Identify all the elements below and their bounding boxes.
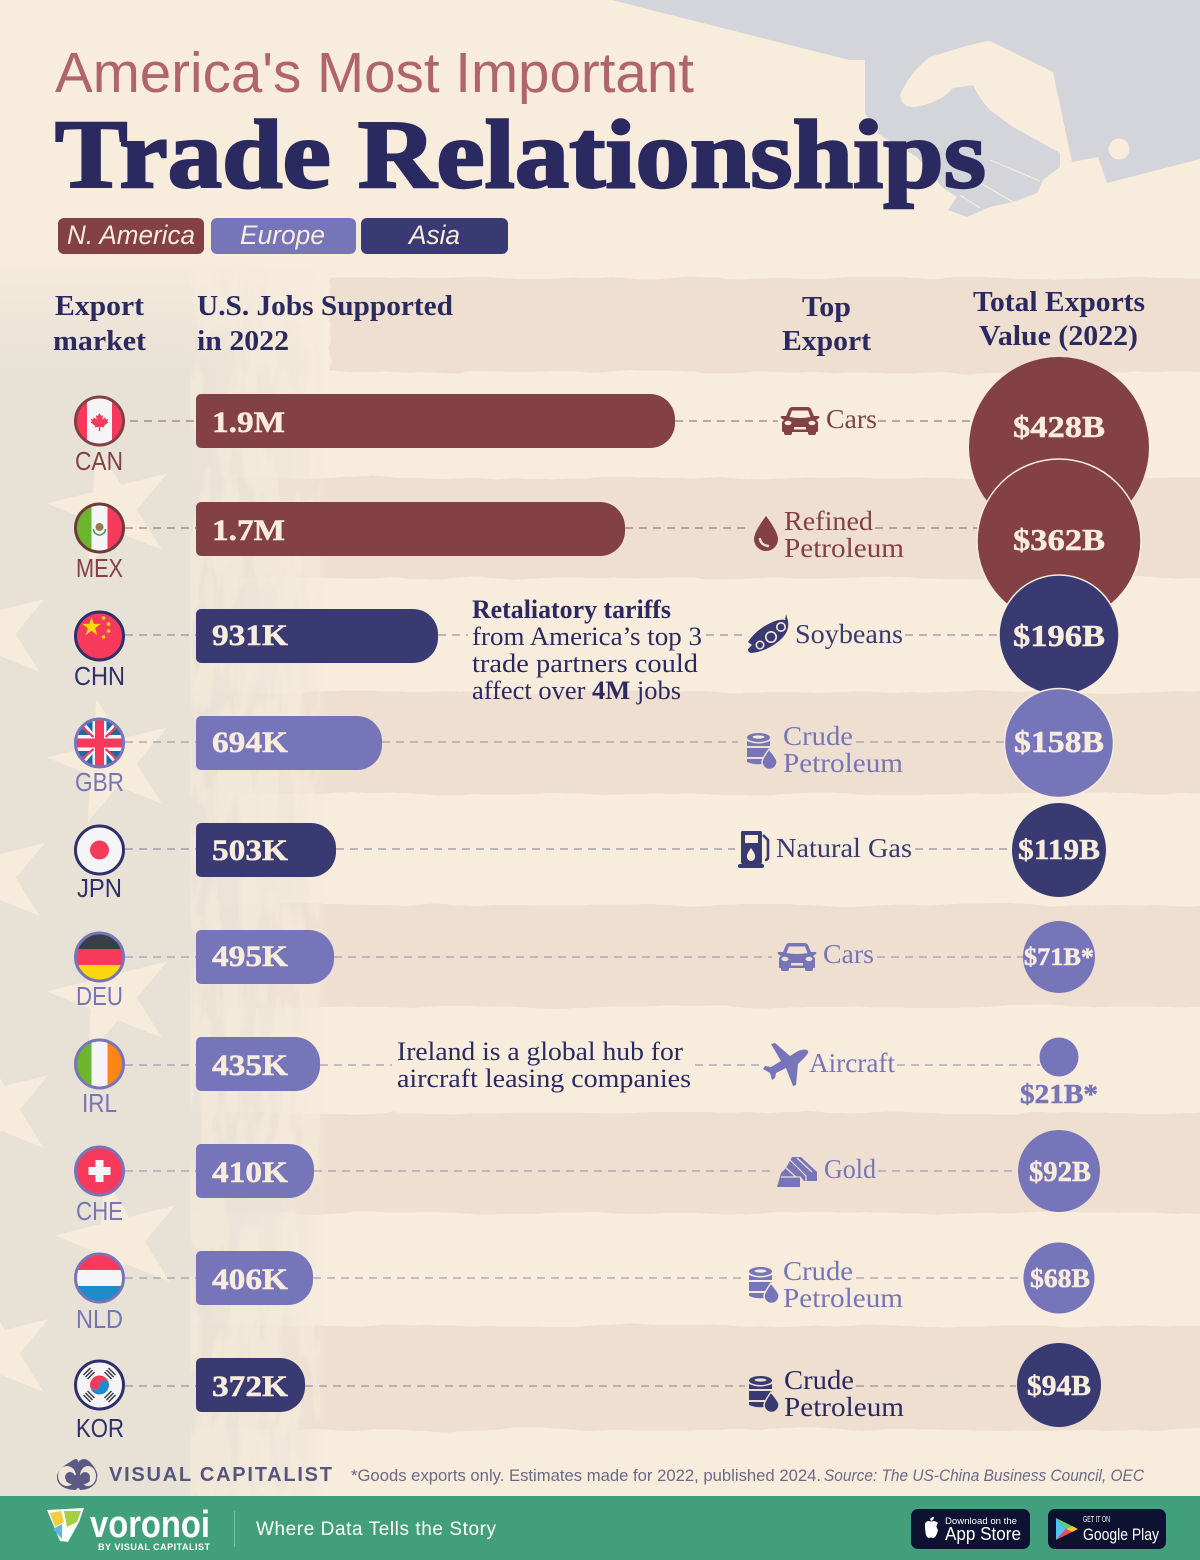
column headers: in 2022 [197, 326, 289, 357]
bar: Canada 1.9M [196, 394, 675, 448]
legend: N. America [67, 220, 195, 250]
bar: Ireland 435K: 435K [212, 1049, 289, 1082]
flag: Canada [74, 396, 124, 446]
annotation: retaliatory tariffs: trade partners could [472, 649, 698, 678]
column headers: U.S. Jobs Supported [197, 291, 453, 322]
bar: South Korea 372K [196, 1358, 305, 1412]
bubble values: $92B [1029, 1156, 1091, 1188]
bar: Switzerland 410K [196, 1144, 314, 1198]
annotation: retaliatory tariffs: from America’s top 3 [472, 622, 702, 651]
column headers: market [53, 326, 147, 357]
top export labels: Petroleum [783, 748, 903, 778]
country codes: CAN [75, 446, 123, 476]
App Store badge: App Store [945, 1524, 1021, 1544]
bar: Netherlands 406K [196, 1251, 313, 1305]
annotation: retaliatory tariffs: Retaliatory tariffs [472, 595, 671, 624]
bar: China 931K [196, 609, 438, 663]
top export labels: Soybeans [795, 619, 903, 649]
title: America's Most Important [55, 41, 694, 105]
bubble values [1013, 409, 1105, 1402]
bar: UK 694K: 694K [212, 726, 289, 759]
country codes: GBR [75, 767, 124, 797]
country codes: JPN [77, 873, 122, 903]
flag: Switzerland [76, 1147, 124, 1195]
icon: airplane (Ireland) [763, 1043, 808, 1086]
column headers: Top [802, 292, 851, 323]
flag: Ireland [74, 1039, 124, 1089]
flag: South Korea [76, 1361, 124, 1409]
tagline: Where Data Tells the Story [256, 1519, 496, 1540]
handshake illustration [612, 0, 1200, 217]
flag: Mexico [74, 503, 124, 553]
top export labels: Aircraft [809, 1048, 895, 1078]
country codes [74, 446, 125, 1443]
annotation: Ireland aircraft leasing: aircraft leasing companies [397, 1064, 691, 1093]
bar: Switzerland 410K: 410K [212, 1156, 289, 1189]
bubble values: $71B* [1024, 944, 1094, 971]
legend: Asia [407, 220, 460, 250]
Voronoi logo: voronoi [90, 1504, 210, 1546]
exports value bubbles [969, 357, 1149, 1427]
country codes: KOR [76, 1413, 124, 1443]
Voronoi logo [47, 1504, 210, 1552]
icon: gold bars (Switzerland) [777, 1157, 817, 1187]
bar: Germany 495K [196, 930, 334, 984]
background stripes [0, 278, 1200, 1430]
country codes: CHE [76, 1196, 123, 1226]
App Store badge: Download on the [945, 1516, 1017, 1527]
bubble values: $119B [1018, 835, 1100, 866]
bar: Ireland 435K [196, 1037, 320, 1091]
bar: Germany 495K: 495K [212, 940, 289, 973]
legend [58, 218, 508, 254]
icon: barrel (Netherlands) [749, 1267, 779, 1304]
top export labels [776, 404, 912, 1422]
top export labels: Petroleum [783, 1283, 903, 1313]
footnote [351, 1466, 1145, 1485]
icon: car (Germany) [778, 943, 816, 971]
flag: China [74, 611, 124, 661]
App Store badge [911, 1509, 1030, 1549]
flag: United Kingdom [74, 718, 124, 768]
Voronoi logo: BY VISUAL CAPITALIST [98, 1542, 210, 1552]
bar: Japan 503K [196, 823, 336, 877]
title [55, 41, 986, 209]
annotation: Ireland aircraft leasing [397, 1037, 691, 1093]
dashed connector lines [125, 421, 1040, 1386]
bubble values: $362B [1013, 522, 1105, 557]
bar: Mexico 1.7M: 1.7M [212, 514, 285, 547]
Google Play badge: GET IT ON [1083, 1514, 1110, 1524]
annotation: retaliatory tariffs: affect over 4M jobs [472, 676, 681, 705]
bubble values: $428B [1013, 409, 1105, 444]
icon: barrel (South Korea) [749, 1376, 779, 1412]
flag: Germany [74, 932, 124, 982]
bar: Canada 1.9M: 1.9M [212, 406, 285, 439]
icon: fuel pump (Japan) [738, 831, 768, 868]
bubble values: $196B [1013, 618, 1105, 653]
bar: UK 694K [196, 716, 382, 770]
top export labels: Cars [826, 404, 877, 434]
column headers: Export [782, 326, 872, 357]
top export labels: Cars [823, 939, 874, 969]
top export labels: Crude [783, 1256, 853, 1286]
country codes: NLD [76, 1304, 123, 1334]
top export labels: Petroleum [784, 533, 904, 563]
icon: soybeans (China) [748, 614, 788, 653]
bar: South Korea 372K: 372K [212, 1370, 289, 1403]
bubble values: $68B [1030, 1264, 1090, 1293]
icon: car (Canada) [781, 407, 819, 435]
footer band [0, 1496, 1200, 1560]
top export labels: Gold [824, 1154, 876, 1184]
top export labels: Refined [784, 506, 874, 536]
bar: Netherlands 406K: 406K [212, 1263, 289, 1296]
country codes: CHN [74, 661, 125, 691]
footnote: *Goods exports only. Estimates made for 2022, published 2024. [351, 1466, 821, 1485]
Visual Capitalist logo: VISUAL CAPITALIST [109, 1464, 332, 1486]
country codes: IRL [82, 1088, 117, 1118]
annotation: Ireland aircraft leasing: Ireland is a global hub for [397, 1037, 683, 1066]
title: Trade Relationships [55, 101, 986, 209]
top export labels: Natural Gas [776, 833, 912, 863]
top export labels: Crude [783, 721, 853, 751]
flag: Netherlands [74, 1253, 124, 1303]
bar: Japan 503K: 503K [212, 834, 289, 867]
country codes: MEX [76, 553, 123, 583]
bubble values: $21B* [1020, 1079, 1098, 1109]
top export labels: Petroleum [784, 1392, 904, 1422]
bar: Mexico 1.7M [196, 502, 625, 556]
annotation: retaliatory tariffs [472, 595, 702, 705]
background canton with stars [0, 262, 330, 1496]
bubble values: $94B [1027, 1371, 1091, 1402]
flag: Japan [76, 826, 124, 874]
footnote: Source: The US-China Business Council, OEC [824, 1466, 1145, 1485]
column headers: Export [55, 291, 145, 322]
country codes: DEU [76, 981, 123, 1011]
column headers [53, 287, 1145, 357]
column headers: Value (2022) [979, 321, 1138, 352]
Google Play badge: Google Play [1083, 1525, 1159, 1544]
top export labels: Crude [784, 1365, 854, 1395]
legend: Europe [240, 220, 325, 250]
column headers: Total Exports [973, 287, 1145, 318]
icon: oil drop (Mexico) [754, 516, 778, 551]
bar: China 931K: 931K [212, 619, 289, 652]
icon: barrel (UK) [747, 733, 777, 770]
bubble values: $158B [1014, 724, 1104, 759]
Visual Capitalist logo [57, 1459, 332, 1490]
Google Play badge [1048, 1509, 1166, 1549]
